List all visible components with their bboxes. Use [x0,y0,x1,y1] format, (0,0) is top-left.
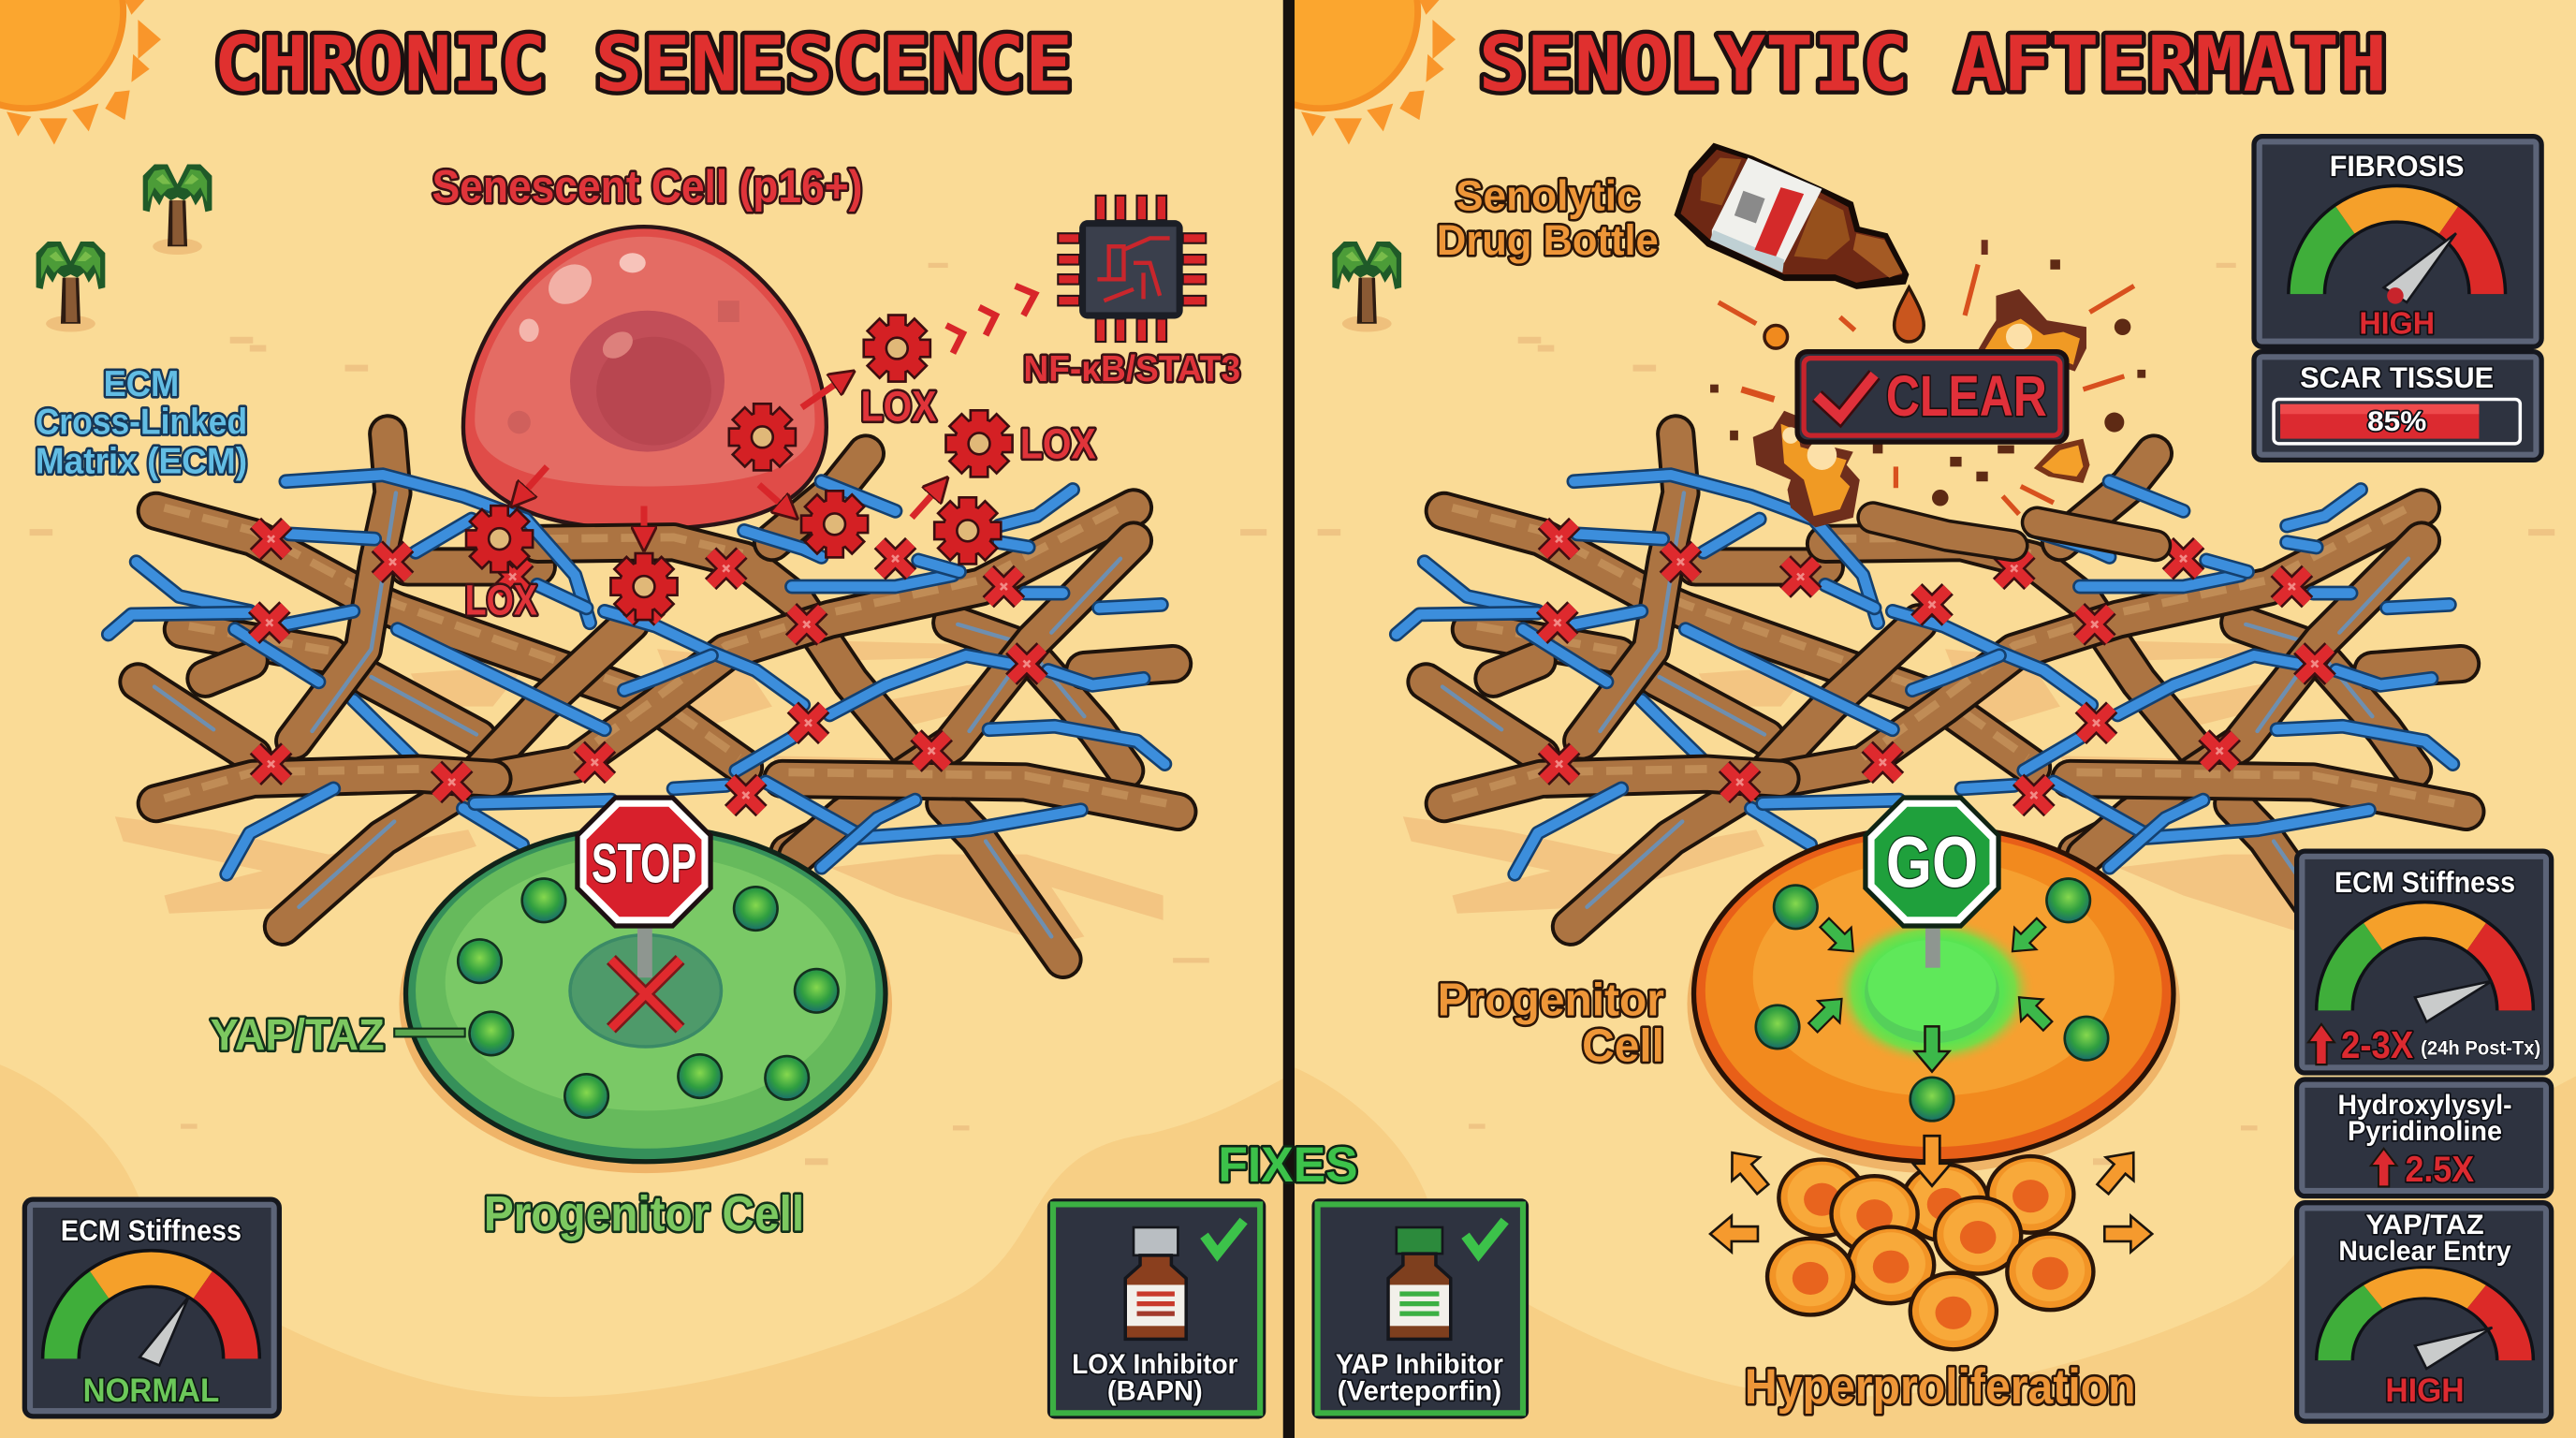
labels: LOX: LOX [1020,420,1096,468]
heading: fixes: FIXES [1218,1137,1358,1193]
label: ECM cross-linked matrix: ECM [104,364,179,404]
label: ECM cross-linked matrix: Cross-Linked [36,402,247,442]
icon: sun [1295,0,1456,144]
label: senolytic drug bottle: Senolytic [1456,172,1640,220]
icon: palm tree upper [143,165,212,255]
desert ground patches [0,263,1288,1438]
panel: scar tissue bar: SCAR TISSUE [2300,360,2494,394]
labels: LOX: LOX [861,382,937,430]
panel: fibrosis gauge [2254,137,2541,346]
label: progenitor cell: Cell [1582,1021,1664,1072]
orange proliferation arrows [1710,1136,2152,1252]
panel: ECM stiffness elevated gauge: (24h Post-Tx) [2421,1038,2540,1060]
go sign [1863,795,2001,968]
panel: ECM stiffness elevated gauge: 2-3X [2341,1023,2413,1066]
panel: ECM stiffness normal gauge [24,1199,279,1416]
label: YAP/TAZ with leader: YAP/TAZ [211,1010,385,1060]
nuclear block cross [611,929,681,1029]
desert ground patches [1288,263,2576,1438]
CLEAR status badge [1797,352,2067,442]
cross-linked ECM mesh [1397,433,2466,960]
progenitor cell, activated [1687,827,2180,1173]
label: senolytic drug bottle [1437,172,1659,264]
title: chronic senescence: SENESCENCE [594,22,1073,110]
green nuclear entry arrows [1802,912,2058,1072]
label: ECM cross-linked matrix [36,364,247,481]
title: chronic senescence [213,22,1073,110]
label: hyperproliferation: Hyperproliferation [1745,1359,2136,1415]
CLEAR status badge: CLEAR [1886,364,2047,429]
labels: LOX: LOX [465,576,537,624]
title: senolytic aftermath: SENOLYTIC [1479,22,1909,110]
stop sign: STOP [592,831,696,894]
panel: ECM stiffness normal gauge: NORMAL [83,1372,219,1409]
icon: tipped senolytic drug bottle with drop [1674,143,1924,342]
title: senolytic aftermath [1479,22,2387,110]
panel: senolytic aftermath [1221,0,2576,1438]
panel: hydroxylysyl-pyridinoline: Pyridinoline [2348,1116,2502,1147]
label: senolytic drug bottle: Drug Bottle [1437,216,1659,264]
daughter cells: hyperproliferation cluster [1765,1154,2096,1352]
senescent cell body [463,227,827,529]
panel: LOX inhibitor fix [1050,1201,1264,1416]
explosion sparks and debris [1710,240,2145,514]
panel: YAP inhibitor fix [1314,1201,1526,1416]
explosions from cleared senescent cell [1753,289,2089,527]
title: senolytic aftermath: AFTERMATH [1955,22,2387,110]
panel: ECM stiffness elevated gauge [2297,851,2552,1073]
panel: YAP inhibitor fix: (Verteporfin) [1338,1375,1501,1406]
panel: YAP/TAZ nuclear entry gauge: Nuclear Entry [2338,1236,2511,1267]
panel: ECM stiffness elevated gauge: ECM Stiffness [2334,865,2515,899]
YAP/TAZ molecules entering nucleus [1754,877,2110,1123]
icon: palm tree [1332,242,1401,332]
signal chevrons to NF-kB chip [946,286,1035,353]
panel: YAP/TAZ nuclear entry gauge: YAP/TAZ [2365,1210,2484,1240]
stop sign [575,795,713,929]
panel: YAP inhibitor fix: YAP Inhibitor [1336,1349,1503,1380]
panel: fibrosis gauge: HIGH [2359,306,2435,341]
panel: YAP/TAZ nuclear entry gauge: HIGH [2385,1372,2465,1409]
central divider [1283,0,1295,1438]
panel: hydroxylysyl-pyridinoline: 2.5X [2405,1150,2474,1190]
icon: sun [0,0,161,144]
labels: LOX [465,382,1096,624]
panel: scar tissue bar: 85% [2367,406,2426,437]
LOX enzyme gears [465,314,1014,621]
panel: fibrosis gauge: FIBROSIS [2330,149,2465,183]
label: senescent cell: Senescent Cell (p16+) [432,162,862,213]
label: progenitor cell: Progenitor [1438,976,1664,1026]
icon: palm tree lower [37,242,105,332]
broken log chunks under former cell [1873,518,2156,546]
panel: YAP/TAZ nuclear entry gauge [2297,1203,2552,1421]
panel: hydroxylysyl-pyridinoline [2297,1079,2552,1196]
panel: LOX inhibitor fix: LOX Inhibitor [1072,1349,1238,1380]
YAP/TAZ molecules blocked outside nucleus [457,877,840,1119]
panel: scar tissue bar [2254,352,2541,460]
label: NF-kB/STAT3: NF-κB/STAT3 [1023,349,1240,389]
panel: hydroxylysyl-pyridinoline: Hydroxylysyl- [2338,1090,2512,1121]
label: ECM cross-linked matrix: Matrix (ECM) [36,441,247,481]
progenitor cell, quiescent [399,827,892,1173]
LOX secretion arrows [520,378,940,539]
label: progenitor cell: Progenitor Cell [484,1187,804,1242]
cross-linked ECM mesh [109,433,1178,960]
panel: LOX inhibitor fix: (BAPN) [1107,1375,1203,1406]
panel: chronic senescence [0,0,1288,1438]
go sign: GO [1886,823,1978,903]
icon: NF-kB/STAT3 chip [1058,196,1206,342]
title: chronic senescence: CHRONIC [213,22,547,110]
label: progenitor cell [1438,976,1664,1072]
panel: ECM stiffness normal gauge: ECM Stiffness [61,1213,242,1247]
